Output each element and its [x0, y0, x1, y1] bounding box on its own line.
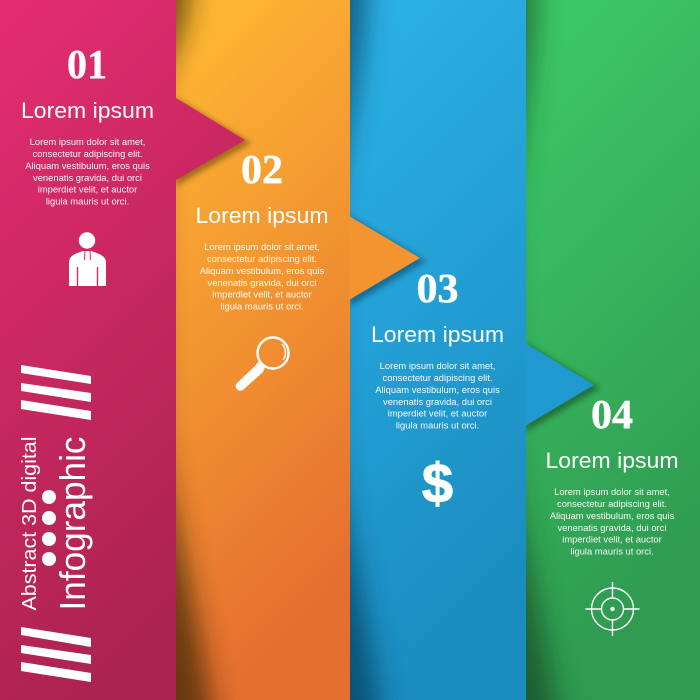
- panel: orange arrow tab: [349, 216, 420, 300]
- heading 03: Lorem ipsum: [371, 322, 504, 347]
- text block 03: ligula mauris ut orci.: [396, 420, 479, 430]
- text block 02: Lorem ipsum dolor sit amet,: [204, 241, 320, 252]
- panel: orange column background: [176, 0, 350, 700]
- panel: green column background: [526, 0, 700, 700]
- panel: blue arrow tab: [525, 343, 594, 426]
- text block 02: ligula mauris ut orci.: [220, 300, 304, 312]
- text block 03: consectetur adipiscing elit.: [383, 372, 492, 383]
- text block 01: imperdiet velit, et auctor: [38, 184, 137, 194]
- text block 01: ligula mauris ut orci.: [46, 196, 129, 206]
- text block 04: imperdiet velit, et auctor: [562, 534, 662, 544]
- shadow on green column: [460, 0, 600, 700]
- text block 01: [25, 136, 150, 206]
- heading 02: Lorem ipsum: [196, 203, 328, 228]
- text block 02: [200, 241, 325, 312]
- text block 02: consectetur adipiscing elit.: [207, 253, 317, 264]
- text block 03: imperdiet velit, et auctor: [388, 408, 487, 418]
- text block 02: Aliquam vestibulum, eros quis: [200, 265, 325, 276]
- heading 01: Lorem ipsum: [21, 98, 154, 123]
- text block 04: Aliquam vestibulum, eros quis: [550, 510, 675, 521]
- text block 01: Aliquam vestibulum, eros quis: [25, 160, 150, 171]
- text block 04: [550, 486, 675, 556]
- text block 02: imperdiet velit, et auctor: [212, 288, 312, 300]
- text block 04: Lorem ipsum dolor sit amet,: [554, 486, 670, 497]
- text block 04: consectetur adipiscing elit.: [557, 498, 667, 509]
- panel: blue column background: [350, 0, 526, 700]
- step 04: [546, 391, 678, 636]
- top stripes: [21, 365, 91, 420]
- step 03: [371, 265, 504, 514]
- step 01: [21, 41, 154, 286]
- dots: [42, 490, 56, 566]
- text block 03: Aliquam vestibulum, eros quis: [375, 384, 500, 395]
- number 02: 02: [241, 146, 283, 192]
- icon: businessman: [69, 232, 106, 286]
- text block 01: Lorem ipsum dolor sit amet,: [30, 136, 145, 147]
- icon: magnifying glass: [236, 338, 288, 391]
- shadow on orange column: [110, 0, 251, 700]
- text block 01: consectetur adipiscing elit.: [33, 148, 142, 159]
- text block 03: venenatis gravida, dui orci: [383, 396, 492, 407]
- number 01: 01: [67, 41, 107, 87]
- text block 01: venenatis gravida, dui orci: [33, 172, 142, 183]
- number 03: 03: [416, 265, 458, 311]
- number 04: 04: [591, 391, 633, 437]
- label: Abstract 3D digital: Abstract 3D digital: [18, 436, 41, 611]
- bottom stripes: [21, 627, 91, 682]
- panel: pink column with arrow: [0, 0, 245, 700]
- brand block: [18, 365, 93, 682]
- label: Infographic: Infographic: [52, 436, 93, 610]
- text block 03: Lorem ipsum dolor sit amet,: [380, 360, 495, 371]
- text block 03: [375, 360, 500, 430]
- icon: dollar sign: $: [422, 452, 453, 514]
- text block 02: venenatis gravida, dui orci: [208, 277, 316, 288]
- text block 04: venenatis gravida, dui orci: [558, 522, 666, 533]
- text block 04: ligula mauris ut orci.: [570, 546, 654, 556]
- heading 04: Lorem ipsum: [546, 448, 678, 473]
- step 02: [196, 146, 328, 391]
- icon: target crosshair: [586, 582, 640, 636]
- shadow on blue column: [285, 0, 426, 700]
